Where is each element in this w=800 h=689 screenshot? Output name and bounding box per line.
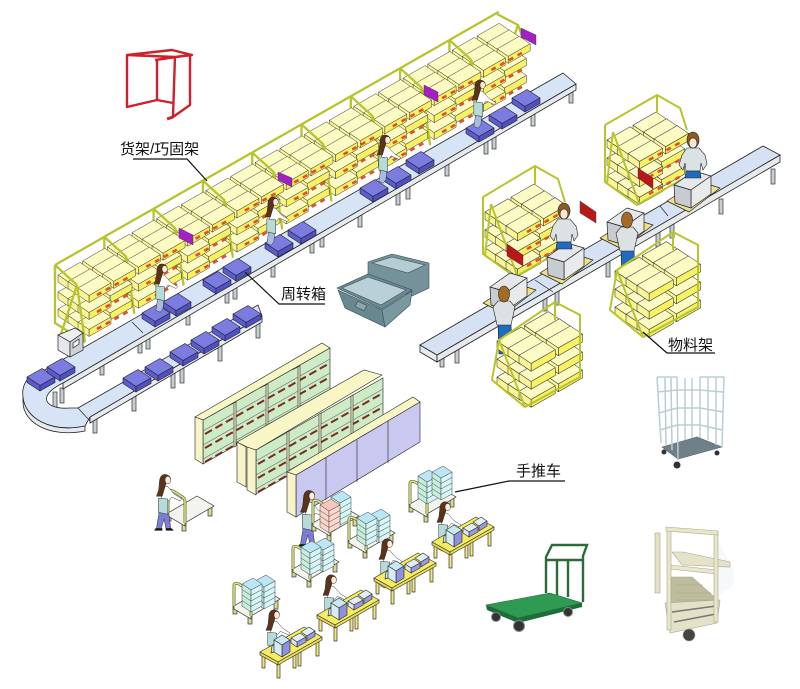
material rack: front lower bbox=[492, 302, 583, 407]
callout: material rack label: 物料架 bbox=[668, 337, 713, 354]
operators at right conveyor bbox=[493, 132, 707, 354]
material rack: upper right bbox=[605, 95, 689, 205]
photo: beige multi-level cart bbox=[655, 527, 734, 641]
loaded hand cart: top bbox=[409, 466, 456, 522]
empty cart with walking worker bbox=[155, 474, 214, 531]
conveyor: long upper and return line bbox=[23, 73, 576, 433]
callout: material rack label bbox=[643, 332, 715, 354]
material rack: middle bbox=[483, 166, 567, 277]
callout: rack label: 货架/巧固架 bbox=[120, 141, 199, 158]
material rack: front right bbox=[610, 232, 701, 337]
grey cartons on conveyor bbox=[483, 171, 720, 314]
callout: tote label: 周转箱 bbox=[281, 286, 326, 303]
photo: metal bins bbox=[337, 254, 429, 327]
loaded hand cart: centre bbox=[348, 509, 395, 558]
purple signs bbox=[179, 28, 536, 245]
photo: roll cage trolley bbox=[657, 377, 724, 468]
callout: tote label bbox=[245, 272, 326, 304]
loaded hand cart: lower bbox=[292, 538, 339, 587]
warehouse shelves bbox=[195, 343, 420, 517]
callout: hand cart label: 手推车 bbox=[516, 463, 561, 480]
right conveyor bbox=[420, 146, 780, 367]
photo: red rack frame bbox=[127, 50, 192, 119]
pickers on long line bbox=[154, 80, 496, 312]
blue totes on conveyors bbox=[27, 90, 540, 392]
photo: green platform cart bbox=[486, 545, 587, 632]
callout: rack label bbox=[120, 141, 207, 181]
long rack: shelving with yellow bins bbox=[55, 12, 530, 342]
loaded hand cart: bottom left bbox=[233, 575, 280, 624]
packing tables with workers bbox=[260, 502, 494, 678]
red signs bbox=[507, 168, 653, 266]
control cabinet bbox=[58, 328, 83, 357]
callout: hand cart label bbox=[455, 463, 565, 492]
loaded hand cart: pink and cyan bbox=[299, 490, 359, 546]
